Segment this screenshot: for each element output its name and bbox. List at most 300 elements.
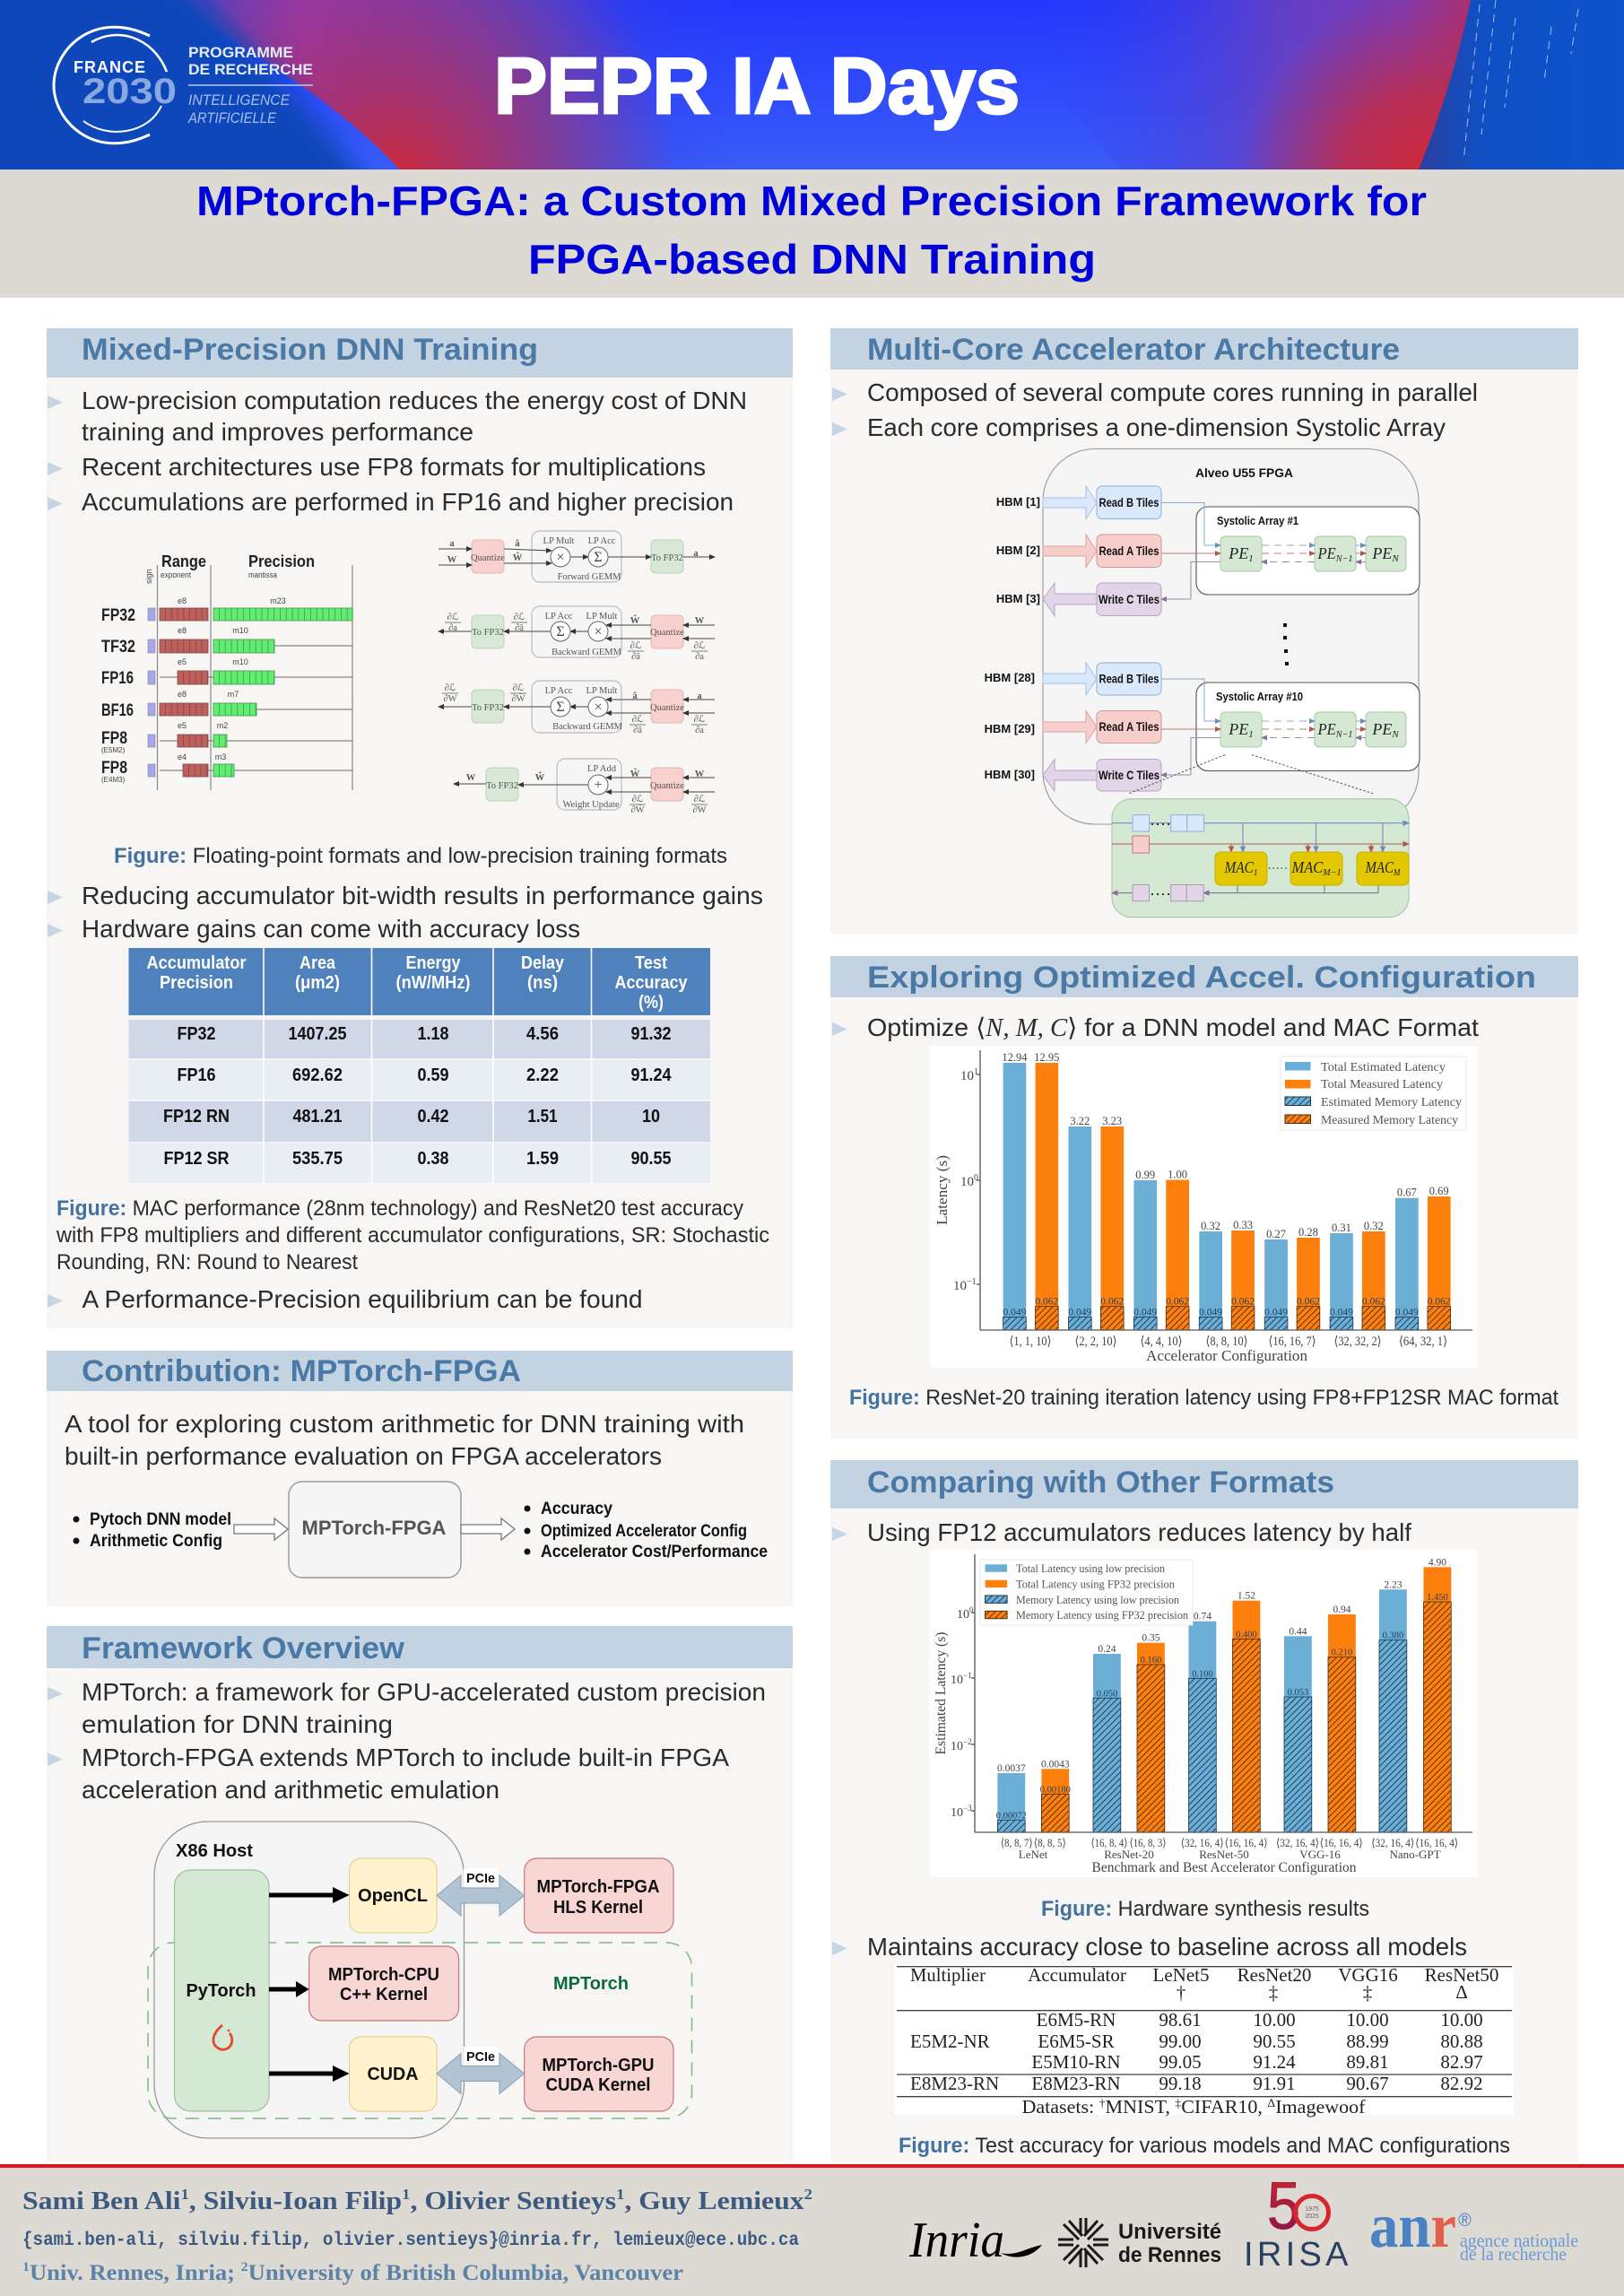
diagram: low-precision training flows: â bbox=[632, 691, 638, 701]
table: MAC performance: FP12 SR bbox=[163, 1149, 230, 1169]
table: MAC performance: (%) bbox=[638, 993, 664, 1013]
systolic array 1: N bbox=[1391, 553, 1399, 564]
bullet list: MPtorch-FPGA extends MPTorch to include built-in FPGA bbox=[82, 1744, 729, 1771]
bullet list bbox=[832, 378, 1478, 441]
panel: Comparing with Other Formats bbox=[830, 1460, 1578, 2163]
authors: Sami Ben Ali bbox=[22, 2187, 167, 2215]
MPTorch-CPU: MPTorch-CPU bbox=[328, 1965, 439, 1985]
legend: Memory Latency using FP32 precision bbox=[1016, 1608, 1188, 1622]
table: test accuracy: 90.67 bbox=[1346, 2073, 1389, 2094]
x axis title: Accelerator Configuration bbox=[1146, 1347, 1307, 1364]
diagram: low-precision training flows: Σ bbox=[594, 550, 603, 565]
tile boxes: Write C Tiles bbox=[1099, 769, 1159, 782]
table: test accuracy: Datasets: bbox=[1022, 2096, 1090, 2118]
diagram: low-precision training flows: ∂a bbox=[695, 726, 704, 735]
table: test accuracy: VGG16 bbox=[1338, 1964, 1398, 1986]
panel: Contribution bbox=[47, 1351, 793, 1606]
diagram: low-precision training flows: a bbox=[693, 549, 699, 559]
axis tick labels: 0 bbox=[974, 1173, 978, 1183]
table: test accuracy: 80.88 bbox=[1440, 2031, 1483, 2052]
MPTorch-GPU kernel: CUDA Kernel bbox=[545, 2075, 651, 2095]
diagram: low-precision training flows: Σ bbox=[556, 624, 565, 639]
table: MAC performance: 90.55 bbox=[631, 1149, 671, 1169]
chart: floating-point formats: (E5M2) bbox=[101, 746, 126, 754]
diagram: low-precision training flows: a bbox=[449, 539, 455, 549]
authors: , Silviu-Ioan Filip bbox=[189, 2187, 402, 2215]
axis tick labels: 10 bbox=[951, 1740, 963, 1753]
chart: floating-point formats: Precision bbox=[248, 552, 315, 570]
logo: France 2030: 2030 bbox=[83, 72, 177, 111]
diagram: low-precision training flows: Quantize bbox=[471, 553, 505, 563]
description: A tool for exploring custom arithmetic for DNN training with bbox=[65, 1410, 744, 1438]
value labels: 0.049 bbox=[1003, 1308, 1027, 1318]
MPTorch group bbox=[148, 1943, 692, 2118]
diagram: low-precision training flows: Weight Update bbox=[562, 800, 620, 810]
CUDA: CUDA bbox=[368, 2065, 418, 2084]
logo: France 2030: PROGRAMME bbox=[188, 44, 293, 61]
affiliations: University of British Columbia, Vancouver bbox=[248, 2261, 683, 2285]
value labels: 0.32 bbox=[1201, 1220, 1220, 1232]
value labels: 0.74 bbox=[1194, 1612, 1211, 1622]
outputs list: Optimized Accelerator Config bbox=[541, 1522, 747, 1541]
title bbox=[196, 178, 1427, 283]
logo: France 2030: DE RECHERCHE bbox=[188, 61, 313, 78]
diagram: low-precision training flows: Σ bbox=[556, 700, 565, 715]
axis tick labels: ⟨8, 8, 10⟩ bbox=[1205, 1335, 1248, 1349]
axis tick labels: ⟨16, 16, 4⟩ bbox=[1415, 1836, 1458, 1849]
figure caption: accuracy: Figure: Test accuracy for various models and MAC configurations bbox=[899, 2134, 1510, 2158]
diagram: low-precision training flows: ∂ℒ bbox=[694, 714, 706, 725]
table: test accuracy: 91.91 bbox=[1253, 2073, 1296, 2094]
bars bbox=[1003, 1063, 1451, 1330]
table: MAC performance: 692.62 bbox=[292, 1065, 343, 1085]
diagram: low-precision training flows: Backward GEMM bbox=[551, 648, 622, 657]
diagram: low-precision training flows: Ŵ bbox=[535, 771, 545, 783]
logo: ANR bbox=[1369, 2192, 1578, 2265]
heading bar bbox=[47, 1626, 793, 1668]
axis tick labels: 10 bbox=[951, 1674, 963, 1687]
diagram: low-precision training flows: To FP32 bbox=[651, 553, 683, 563]
chart: floating-point formats: e8 bbox=[178, 690, 187, 699]
diagram: low-precision training flows: Forward GEMM bbox=[558, 572, 621, 582]
value labels: 0.053 bbox=[1288, 1688, 1308, 1698]
logo: Université de Rennes: de Rennes bbox=[1118, 2243, 1221, 2267]
bullet list: low precision: Low-precision computation reduces the energy cost of DNN bbox=[82, 387, 747, 414]
diagram: low-precision training flows: Ŵ bbox=[513, 552, 523, 563]
heading bar: Contribution: MPTorch-FPGA bbox=[82, 1354, 521, 1388]
authors: 1 bbox=[180, 2186, 189, 2203]
bullet list: Composed of several compute cores running in parallel bbox=[867, 378, 1478, 406]
PE detail: M−1 bbox=[1322, 867, 1342, 878]
diagram: low-precision training flows bbox=[439, 531, 715, 815]
logo: France 2030: ARTIFICIELLE bbox=[187, 109, 277, 126]
axis tick labels: −1 bbox=[967, 1277, 977, 1287]
chart: floating-point formats: (E4M3) bbox=[101, 776, 126, 784]
bullet list: low precision bbox=[48, 387, 747, 516]
diagram: low-precision training flows: ∂ℒ bbox=[632, 794, 644, 804]
table: MAC performance: FP32 bbox=[178, 1024, 215, 1044]
chart: floating-point formats: FP8 bbox=[101, 759, 127, 778]
MPTorch label: MPTorch bbox=[553, 1974, 629, 1994]
description bbox=[65, 1410, 744, 1470]
OpenCL bbox=[350, 1858, 437, 1933]
table: test accuracy: ‡ bbox=[1175, 2096, 1182, 2109]
PyTorch block: PyTorch bbox=[187, 1981, 256, 2001]
systolic array 10: Systolic Array #10 bbox=[1216, 690, 1303, 703]
axis tick labels: ⟨32, 16, 4⟩ bbox=[1181, 1836, 1224, 1849]
table: test accuracy: E8M23-RN bbox=[1031, 2073, 1121, 2094]
diagram: low-precision training flows: Quantize bbox=[650, 781, 684, 791]
table: test accuracy: ResNet20 bbox=[1238, 1964, 1311, 1986]
inputs list: Pytoch DNN model bbox=[90, 1510, 231, 1529]
legend bbox=[1281, 1057, 1466, 1130]
diagram: low-precision training flows: Quantize bbox=[650, 703, 684, 713]
chart: floating-point formats: e5 bbox=[178, 721, 187, 730]
legend: Total Latency using FP32 precision bbox=[1016, 1577, 1175, 1591]
logo: Inria: Inria bbox=[908, 2213, 1004, 2268]
logo: ANR: agence nationale bbox=[1460, 2230, 1578, 2251]
x86 host bbox=[154, 1822, 465, 2138]
logo: IRISA: 5 bbox=[1267, 2169, 1300, 2243]
inputs list bbox=[74, 1510, 231, 1551]
connections bbox=[1128, 502, 1375, 794]
table: MAC performance: Test bbox=[635, 953, 667, 973]
value labels: 0.210 bbox=[1332, 1648, 1352, 1658]
diagram: low-precision training flows: + bbox=[594, 778, 603, 793]
y axis title: Latency (s) bbox=[934, 1155, 951, 1225]
table: MAC performance: Area bbox=[300, 953, 336, 973]
diagram: low-precision training flows: Ŵ bbox=[630, 768, 640, 779]
table: test accuracy: 88.99 bbox=[1346, 2031, 1389, 2052]
value labels: 0.33 bbox=[1233, 1219, 1253, 1231]
authors: 1 bbox=[402, 2186, 410, 2203]
axis tick labels: ⟨16, 16, 4⟩ bbox=[1320, 1836, 1363, 1849]
heading bar: Framework Overview bbox=[82, 1631, 405, 1665]
systolic array 1: PE bbox=[1372, 544, 1392, 562]
HBM labels: HBM [28] bbox=[985, 671, 1035, 684]
diagram: low-precision training flows: â bbox=[515, 539, 520, 549]
panel: Multi-Core Accelerator Architecture bbox=[830, 328, 1578, 934]
logo: France 2030 bbox=[54, 27, 313, 144]
chart: floating-point formats: e5 bbox=[178, 657, 187, 666]
value labels: 0.049 bbox=[1068, 1308, 1091, 1318]
table: MAC performance: 91.32 bbox=[631, 1024, 671, 1044]
systolic array 10: PE bbox=[1318, 720, 1338, 738]
chart: floating-point formats: FP8 bbox=[101, 729, 127, 748]
axis tick labels: ⟨32, 16, 4⟩ bbox=[1276, 1836, 1319, 1849]
table: test accuracy: † bbox=[1099, 2096, 1106, 2109]
table: test accuracy: ResNet50 bbox=[1425, 1964, 1498, 1986]
axis tick labels: ⟨8, 8, 5⟩ bbox=[1034, 1836, 1066, 1849]
arrow: PCIe FPGA: PCIe bbox=[466, 1871, 495, 1886]
MPTorch-GPU kernel bbox=[525, 2037, 673, 2111]
PE detail: MAC bbox=[1225, 858, 1259, 876]
diagram: tool inputs and outputs bbox=[74, 1482, 768, 1578]
title: FPGA-based DNN Training bbox=[528, 236, 1096, 283]
legend: Memory Latency using low precision bbox=[1016, 1593, 1179, 1606]
value labels: 3.22 bbox=[1070, 1115, 1090, 1127]
diagram: low-precision training flows: LP Acc bbox=[588, 536, 616, 546]
PE detail: MAC bbox=[1365, 858, 1399, 876]
diagram: framework bbox=[148, 1822, 692, 2138]
value labels: 0.062 bbox=[1297, 1297, 1320, 1308]
table: MAC performance: 0.42 bbox=[418, 1107, 448, 1126]
value labels: 12.94 bbox=[1002, 1051, 1028, 1064]
axis tick labels: −2 bbox=[963, 1737, 972, 1746]
HBM labels: HBM [29] bbox=[985, 722, 1035, 735]
diagram: low-precision training flows: ∂ℒ bbox=[447, 612, 459, 622]
chart: floating-point formats: m10 bbox=[232, 626, 248, 635]
table: MAC performance: (ns) bbox=[527, 973, 558, 993]
value labels: 0.062 bbox=[1428, 1297, 1451, 1308]
table: test accuracy: 82.92 bbox=[1440, 2073, 1483, 2094]
axis tick labels: −1 bbox=[963, 1671, 972, 1680]
diagram: low-precision training flows: LP Mult bbox=[586, 612, 618, 622]
value labels: 1.450 bbox=[1427, 1593, 1448, 1603]
value labels: 0.400 bbox=[1236, 1630, 1257, 1639]
table: test accuracy: 99.05 bbox=[1159, 2051, 1202, 2073]
value labels: 0.062 bbox=[1231, 1297, 1255, 1308]
diagram: low-precision training flows: ∂ℒ bbox=[630, 640, 642, 651]
axis tick labels: 10 bbox=[957, 1608, 969, 1622]
outputs list: Accelerator Cost/Performance bbox=[541, 1543, 768, 1561]
systolic array 10: 1 bbox=[1248, 729, 1254, 740]
heading bar bbox=[47, 328, 793, 378]
value labels: 0.062 bbox=[1166, 1297, 1189, 1308]
diagram: low-precision training flows: W bbox=[447, 555, 457, 565]
table: test accuracy: ‡ bbox=[1269, 1982, 1278, 2004]
OpenCL: OpenCL bbox=[358, 1886, 428, 1906]
diagram: low-precision training flows: × bbox=[556, 550, 565, 565]
bullet: latency: Using FP12 accumulators reduces latency by half bbox=[867, 1518, 1411, 1546]
diagram: low-precision training flows: × bbox=[594, 700, 603, 715]
systolic array 10: PE bbox=[1372, 720, 1392, 738]
figure caption: MAC performance: with FP8 multipliers and different accumulator configurations, SR: Stochastic bbox=[56, 1223, 769, 1248]
figure caption: MAC performance bbox=[56, 1196, 769, 1274]
logo: IRISA: IRISA bbox=[1244, 2236, 1349, 2274]
chart: floating-point formats: m23 bbox=[270, 596, 286, 605]
arrow: tool to outputs bbox=[461, 1518, 515, 1540]
axis tick labels: ⟨16, 8, 3⟩ bbox=[1130, 1836, 1166, 1849]
HBM labels: HBM [2] bbox=[996, 544, 1040, 557]
heading bar: Comparing with Other Formats bbox=[867, 1465, 1334, 1500]
table: test accuracy: ‡ bbox=[1363, 1982, 1372, 2004]
axis tick labels: ⟨16, 16, 4⟩ bbox=[1225, 1836, 1268, 1849]
arrow: PCIe GPU bbox=[437, 2047, 525, 2093]
logo: France 2030: INTELLIGENCE bbox=[188, 91, 291, 109]
bars bbox=[997, 1567, 1451, 1832]
diagram: low-precision training flows: To FP32 bbox=[486, 781, 518, 791]
bullet list: low precision: Accumulations are performed in FP16 and higher precision bbox=[82, 488, 734, 516]
table: test accuracy: Δ bbox=[1267, 2096, 1275, 2109]
affiliations: 1 bbox=[22, 2260, 30, 2274]
ellipsis dots bbox=[1283, 623, 1289, 665]
systolic array 10: N−1 bbox=[1335, 729, 1352, 740]
heading bar bbox=[830, 956, 1578, 997]
bullet list: accumulators: Reducing accumulator bit-width results in performance gains bbox=[82, 882, 763, 909]
chart: floating-point formats: mantissa bbox=[248, 570, 277, 579]
table: MAC performance: 2.22 bbox=[526, 1065, 559, 1085]
table: MAC performance: 91.24 bbox=[631, 1065, 672, 1085]
tile boxes: Read B Tiles bbox=[1099, 496, 1159, 509]
table: test accuracy: 90.55 bbox=[1253, 2031, 1296, 2052]
bullet list: low precision: training and improves performance bbox=[82, 418, 473, 446]
value labels: 0.0043 bbox=[1041, 1759, 1070, 1770]
logo: IRISA bbox=[1244, 2169, 1349, 2274]
value labels: 1.52 bbox=[1238, 1591, 1255, 1602]
legend bbox=[980, 1560, 1193, 1625]
axis tick labels: ⟨16, 8, 4⟩ bbox=[1090, 1836, 1128, 1849]
arrow: inputs to tool bbox=[234, 1518, 288, 1540]
value labels: 0.35 bbox=[1142, 1633, 1160, 1644]
value labels: 2.23 bbox=[1384, 1579, 1403, 1590]
value labels: 0.00072 bbox=[996, 1811, 1027, 1821]
event name: PEPR IA Days bbox=[494, 41, 1020, 130]
legend: Total Measured Latency bbox=[1321, 1078, 1443, 1091]
table: test accuracy: E6M5-RN bbox=[1037, 2009, 1116, 2031]
axes bbox=[971, 1554, 1472, 1832]
legend: Measured Memory Latency bbox=[1321, 1114, 1458, 1127]
MPTorch-GPU kernel: MPTorch-GPU bbox=[542, 2056, 655, 2075]
value labels: 0.380 bbox=[1383, 1631, 1403, 1641]
figure caption: MAC performance: Figure: MAC performance (28nm technology) and ResNet20 test accuracy bbox=[56, 1196, 743, 1221]
table: test accuracy: 99.00 bbox=[1159, 2031, 1202, 2052]
logo: Université de Rennes: Université bbox=[1118, 2220, 1221, 2244]
heading bar: Mixed-Precision DNN Training bbox=[82, 333, 538, 367]
systolic array 1: PE bbox=[1229, 544, 1248, 562]
table: MAC performance: Delay bbox=[521, 953, 565, 973]
value labels: 0.100 bbox=[1192, 1669, 1213, 1679]
value labels: 0.24 bbox=[1098, 1644, 1116, 1655]
table: MAC performance: 0.38 bbox=[418, 1149, 448, 1169]
table: test accuracy: 91.24 bbox=[1253, 2051, 1296, 2073]
chart: floating-point formats: m7 bbox=[228, 690, 239, 699]
table: MAC performance: FP16 bbox=[178, 1065, 215, 1085]
authors: 1 bbox=[616, 2186, 624, 2203]
table: test accuracy: E8M23-RN bbox=[910, 2073, 999, 2094]
bullet list: acceleration and arithmetic emulation bbox=[82, 1776, 499, 1804]
systolic array 1: N−1 bbox=[1335, 553, 1352, 564]
title band bbox=[0, 170, 1624, 298]
systolic array 1: Systolic Array #1 bbox=[1217, 514, 1298, 527]
axis tick labels: 10 bbox=[960, 1069, 974, 1083]
diagram: low-precision training flows: Backward GEMM bbox=[552, 722, 623, 732]
axis tick labels: 0 bbox=[969, 1605, 974, 1614]
diagram: low-precision training flows: LP Acc bbox=[545, 612, 573, 622]
axis tick labels: ⟨32, 32, 2⟩ bbox=[1334, 1335, 1381, 1349]
heading bar bbox=[47, 1351, 793, 1391]
heading bar: Exploring Optimized Accel. Configuration bbox=[867, 961, 1536, 995]
value labels: 0.049 bbox=[1330, 1308, 1353, 1318]
diagram: low-precision training flows: ∂a bbox=[448, 623, 457, 633]
y axis title: Estimated Latency (s) bbox=[934, 1632, 949, 1754]
axis tick labels: 10 bbox=[951, 1806, 963, 1820]
authors: , Guy Lemieux bbox=[624, 2187, 804, 2215]
value labels: 0.049 bbox=[1133, 1308, 1157, 1318]
table: test accuracy: 10.00 bbox=[1346, 2009, 1389, 2031]
bullet: optimize: Optimize ⟨N, M, C⟩ for a DNN model and MAC Format bbox=[867, 1013, 1479, 1042]
diagram: low-precision training flows: ∂ℒ bbox=[632, 714, 644, 725]
arrow: PCIe FPGA bbox=[437, 1868, 525, 1916]
title: MPtorch-FPGA: a Custom Mixed Precision Framework for bbox=[196, 178, 1427, 224]
heading bar bbox=[830, 1460, 1578, 1509]
axis tick labels: ⟨2, 2, 10⟩ bbox=[1074, 1335, 1117, 1349]
chart: floating-point formats: BF16 bbox=[101, 701, 134, 720]
value labels: 0.049 bbox=[1395, 1308, 1419, 1318]
axis tick labels: ⟨16, 16, 7⟩ bbox=[1268, 1335, 1316, 1349]
value labels: 0.062 bbox=[1100, 1297, 1124, 1308]
value labels: 0.160 bbox=[1141, 1656, 1161, 1665]
axis tick labels: 10 bbox=[960, 1175, 974, 1189]
table: MAC performance: Accumulator bbox=[147, 953, 247, 973]
diagram: low-precision training flows: ∂â bbox=[515, 623, 524, 633]
authors: , Olivier Sentieys bbox=[410, 2187, 616, 2215]
table: MAC performance: FP12 RN bbox=[163, 1107, 230, 1126]
HBM labels: HBM [30] bbox=[985, 768, 1035, 781]
FPGA board bbox=[1043, 448, 1419, 824]
axis tick labels: Nano-GPT bbox=[1389, 1848, 1441, 1861]
HBM block arrows bbox=[1043, 486, 1097, 791]
value labels: 0.94 bbox=[1333, 1605, 1351, 1615]
value labels: 1.00 bbox=[1168, 1168, 1187, 1180]
diagram: low-precision training flows: W bbox=[695, 616, 705, 626]
tool box bbox=[289, 1482, 461, 1578]
PE detail: M bbox=[1393, 867, 1401, 878]
header banner bbox=[0, 0, 1624, 215]
table: MAC performance: 10 bbox=[642, 1107, 660, 1126]
value labels: 4.90 bbox=[1429, 1557, 1446, 1568]
bullet list: MPTorch: a framework for GPU-accelerated custom precision bbox=[82, 1678, 766, 1706]
table: test accuracy: 10.00 bbox=[1440, 2009, 1483, 2031]
chart: floating-point formats: FP16 bbox=[101, 669, 134, 688]
table: test accuracy: 10.00 bbox=[1253, 2009, 1296, 2031]
table: MAC performance: (μm2) bbox=[295, 973, 340, 993]
value labels: 3.23 bbox=[1102, 1115, 1122, 1127]
diagram: low-precision training flows: LP Acc bbox=[545, 686, 573, 696]
table: MAC performance: 0.59 bbox=[418, 1065, 448, 1085]
table: test accuracy: E5M2-NR bbox=[910, 2031, 990, 2052]
bullet list: accumulators bbox=[48, 882, 763, 943]
axis tick labels: ⟨8, 8, 7⟩ bbox=[1001, 1836, 1033, 1849]
diagram: low-precision training flows: a bbox=[697, 691, 702, 701]
tile boxes: Write C Tiles bbox=[1099, 593, 1159, 606]
table: test accuracy: 82.97 bbox=[1440, 2051, 1483, 2073]
value labels: 0.28 bbox=[1298, 1226, 1318, 1239]
logo: ANR: ® bbox=[1458, 2211, 1472, 2231]
MPTorch-FPGA kernel: HLS Kernel bbox=[553, 1898, 643, 1918]
table: MAC performance: 1407.25 bbox=[289, 1024, 346, 1044]
diagram: low-precision training flows: To FP32 bbox=[472, 703, 504, 713]
axis tick labels: −3 bbox=[963, 1804, 972, 1813]
diagram: low-precision training flows: W bbox=[466, 773, 476, 783]
table: test accuracy: E5M10-RN bbox=[1031, 2051, 1121, 2073]
panel: Exploring Optimized Accel. Configuration bbox=[830, 956, 1578, 1439]
diagram: low-precision training flows: ∂W bbox=[443, 694, 457, 704]
systolic array 10: N bbox=[1391, 729, 1399, 740]
diagram: low-precision training flows: ∂â bbox=[633, 726, 642, 735]
PE detail: MAC bbox=[1291, 858, 1325, 876]
axis tick labels: ResNet-50 bbox=[1199, 1848, 1249, 1861]
value labels: 0.049 bbox=[1199, 1308, 1222, 1318]
board label: Alveo U55 FPGA bbox=[1195, 465, 1293, 480]
figure caption: latency: Figure: ResNet-20 training iteration latency using FP8+FP12SR MAC format bbox=[849, 1386, 1559, 1410]
table: test accuracy: CIFAR10, bbox=[1181, 2096, 1267, 2118]
MPTorch-FPGA kernel bbox=[525, 1858, 673, 1933]
heading bar bbox=[830, 328, 1578, 370]
PE detail bbox=[1112, 799, 1409, 918]
table: MAC performance: 1.59 bbox=[526, 1149, 559, 1169]
heading bar: Multi-Core Accelerator Architecture bbox=[867, 333, 1400, 367]
